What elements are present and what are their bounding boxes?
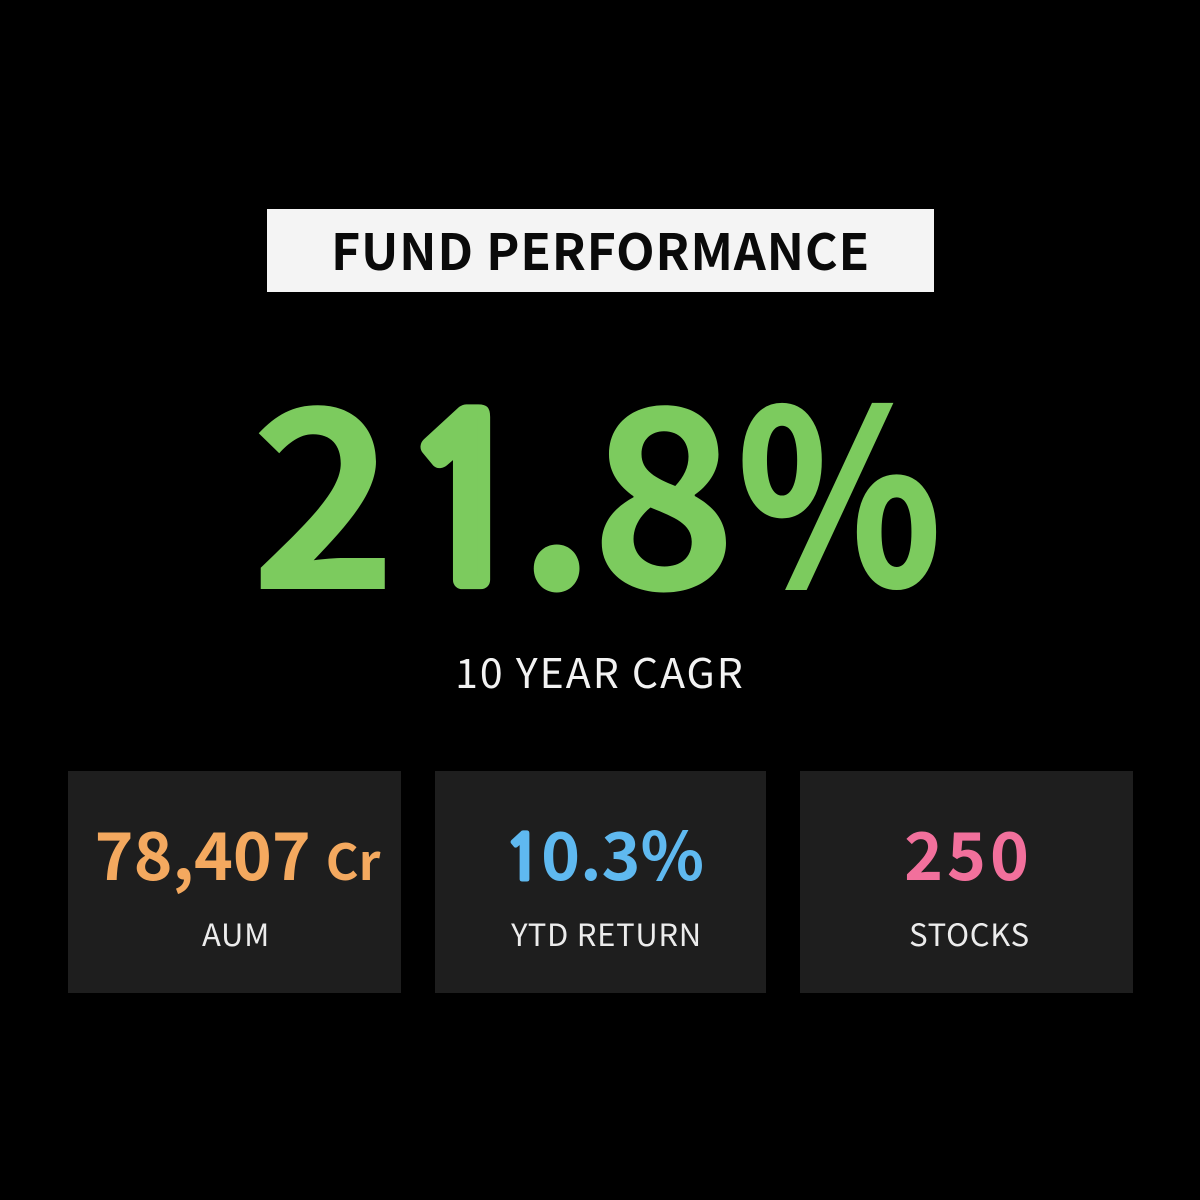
YTD label: YTD RETURN bbox=[511, 910, 702, 955]
title bbox=[267, 209, 934, 292]
headline number: . bbox=[516, 299, 597, 661]
stocks label: STOCKS bbox=[909, 910, 1030, 955]
headline number: 8 bbox=[590, 299, 738, 661]
AUM label: AUM bbox=[202, 910, 270, 955]
headline number: % bbox=[737, 307, 942, 654]
headline number bbox=[250, 299, 942, 661]
headline caption: 10 YEAR CAGR bbox=[455, 640, 745, 700]
panel: YTD return bbox=[435, 771, 766, 993]
AUM value: 78,407 Cr bbox=[95, 804, 380, 900]
panel: stocks bbox=[800, 771, 1133, 993]
stocks value: 250 bbox=[904, 804, 1033, 900]
title text: FUND PERFORMANCE bbox=[331, 213, 870, 285]
headline number: 1 bbox=[398, 392, 535, 616]
headline number: 2 bbox=[250, 299, 398, 661]
YTD value: 10.3% bbox=[504, 804, 704, 900]
panel: AUM bbox=[68, 771, 401, 993]
